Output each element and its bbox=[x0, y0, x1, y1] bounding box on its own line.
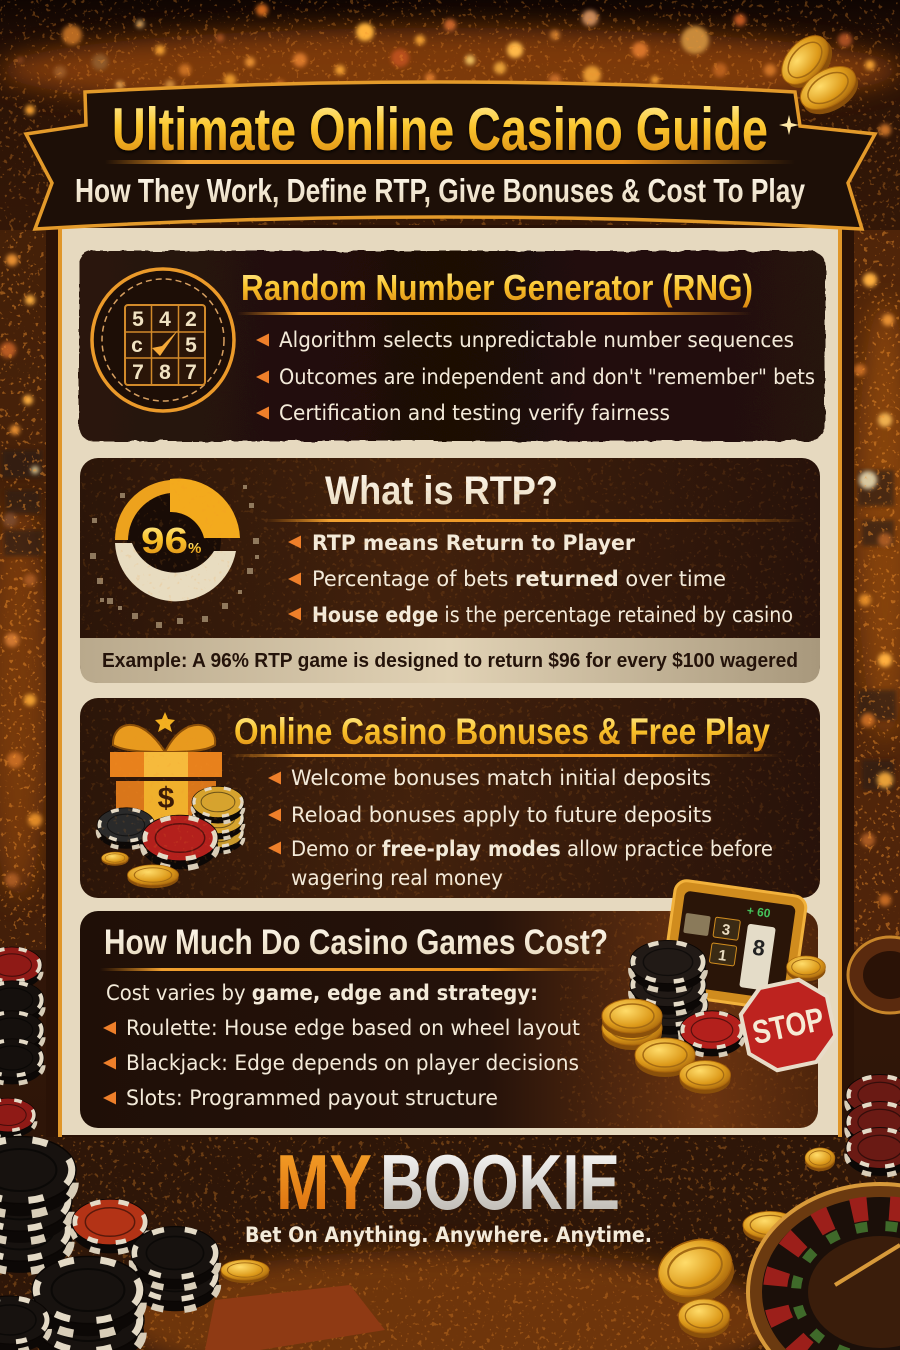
bullets: RNG: Algorithm selects unpredictable number sequences bbox=[279, 328, 794, 352]
icon: stop sign bbox=[736, 975, 840, 1075]
example strip: Example: A 96% RTP game is designed to return $96 for every $100 wagered bbox=[102, 650, 798, 672]
decor: poker chips bottom-left bbox=[0, 1136, 269, 1350]
decor: side roulette and chips right bbox=[846, 937, 900, 1176]
icon: calculator: 3 bbox=[721, 921, 731, 939]
parchment frame bbox=[46, 225, 854, 1137]
icon: RNG dial: 7 bbox=[132, 361, 144, 384]
banner divider bbox=[105, 160, 795, 164]
heading rule bbox=[265, 519, 805, 522]
bullets: RNG: Certification and testing verify fairness bbox=[279, 401, 670, 425]
heading: bonuses: Online Casino Bonuses & Free Play bbox=[234, 711, 770, 752]
heading rule bbox=[237, 312, 752, 315]
bullets: cost: Roulette: House edge based on wheel layout bbox=[126, 1016, 580, 1040]
panel: RTP bbox=[80, 458, 820, 683]
panel: bonuses bbox=[80, 698, 820, 898]
panel background bbox=[80, 458, 820, 683]
icon: RNG dial: 2 bbox=[185, 308, 197, 331]
icon: RNG dial: 7 bbox=[185, 361, 197, 384]
icon: top coins bbox=[773, 27, 866, 123]
heading: RTP: What is RTP? bbox=[325, 469, 558, 513]
donut chart: 96%: % bbox=[188, 540, 201, 557]
brand: MyBookie logo bbox=[245, 1138, 652, 1247]
panel: cost bbox=[80, 911, 818, 1128]
icon: RNG dial: 5 bbox=[185, 334, 197, 357]
bullets: cost: Slots: Programmed payout structure bbox=[126, 1086, 498, 1110]
decor: side chips left bbox=[0, 947, 44, 1138]
icon: calculator: 1 bbox=[717, 947, 728, 965]
bullets: bonuses: Demo or free-play modes allow practice before bbox=[291, 837, 773, 861]
bullets: bonuses: Welcome bonuses match initial deposits bbox=[291, 766, 711, 790]
panel background bbox=[80, 911, 818, 1128]
banner bbox=[26, 82, 875, 229]
icon: gift and chips: $ bbox=[158, 782, 175, 815]
logo wordmark: BOOKIE bbox=[380, 1138, 620, 1226]
decor: playing card bbox=[205, 1285, 385, 1350]
bullets: RTP: Percentage of bets returned over time bbox=[312, 567, 726, 591]
heading: RNG: Random Number Generator (RNG) bbox=[241, 267, 753, 308]
icon: RNG dial: 4 bbox=[159, 308, 171, 331]
icon: gift and chips bbox=[97, 712, 244, 888]
bullets: cost bbox=[103, 1016, 580, 1110]
icon: RNG dial: 8 bbox=[159, 361, 171, 384]
icon: calculator bbox=[661, 879, 807, 1011]
panel background bbox=[79, 251, 825, 441]
icon: sparkle bbox=[779, 115, 799, 135]
bullets: RTP: House edge is the percentage retained by casino bbox=[312, 603, 793, 627]
icon: RNG dial: 5 bbox=[132, 308, 144, 331]
bullets: RTP: RTP means Return to Player bbox=[312, 531, 636, 555]
icon: stop sign: STOP bbox=[749, 1000, 827, 1051]
icon: RNG dial bbox=[92, 269, 234, 411]
heading rule bbox=[100, 968, 615, 971]
example strip bbox=[80, 638, 820, 683]
tagline: Bet On Anything. Anywhere. Anytime. bbox=[245, 1223, 652, 1247]
cost intro: Cost varies by game, edge and strategy: bbox=[106, 981, 538, 1005]
icon: chip stack bbox=[630, 940, 744, 1056]
icon: calculator: + 60 bbox=[746, 903, 772, 921]
icon: RNG dial: c bbox=[131, 334, 143, 357]
bullets: cost: Blackjack: Edge depends on player decisions bbox=[126, 1051, 579, 1075]
bullets: RTP bbox=[288, 531, 793, 627]
banner ribbon bbox=[26, 82, 875, 229]
bullets: RNG bbox=[256, 328, 815, 425]
icon: calculator: 8 bbox=[751, 935, 767, 961]
decor: gold coins bottom-right bbox=[651, 1148, 835, 1338]
decor: roulette wheel bbox=[748, 1184, 900, 1350]
heading: cost: How Much Do Casino Games Cost? bbox=[104, 923, 608, 962]
bullets: bonuses: wagering real money bbox=[291, 866, 503, 890]
donut chart: 96%: 96 bbox=[141, 520, 188, 561]
panel background bbox=[80, 698, 820, 898]
heading rule bbox=[230, 754, 782, 757]
icon: gold coins bbox=[602, 956, 826, 1094]
panel texture bbox=[80, 458, 820, 1128]
logo wordmark: MY bbox=[276, 1138, 372, 1226]
bullets: bonuses bbox=[268, 766, 773, 890]
bullets: bonuses: Reload bonuses apply to future deposits bbox=[291, 803, 712, 827]
donut chart: 96% bbox=[90, 478, 259, 628]
bullets: RNG: Outcomes are independent and don't "remember" bets bbox=[279, 365, 815, 389]
panel: RNG bbox=[79, 251, 825, 441]
